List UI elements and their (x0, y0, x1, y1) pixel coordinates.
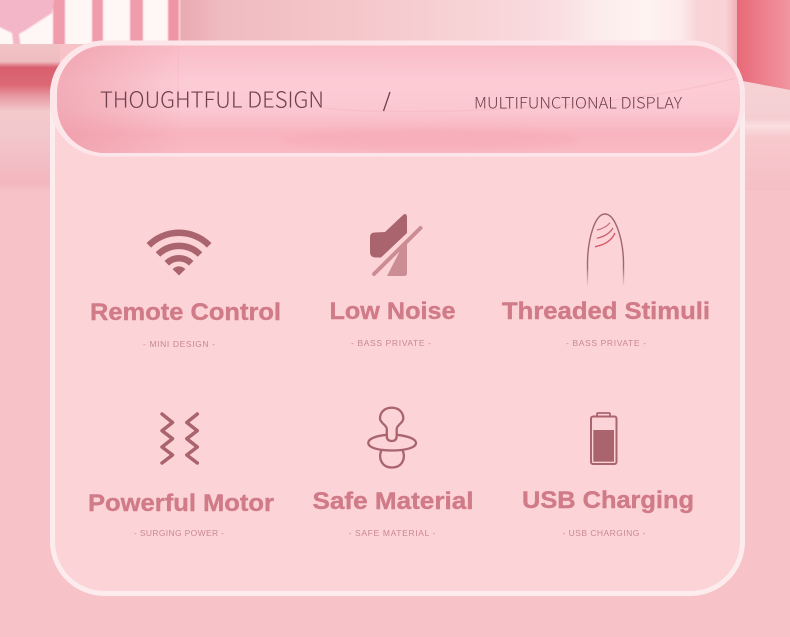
caption: safe material: - SAFE MATERIAL - (348, 528, 436, 538)
title: safe material: Safe Material (312, 488, 474, 515)
feature: low noise (330, 214, 456, 348)
feature: powerful motor (88, 414, 275, 538)
heading: thoughtful design: THOUGHTFUL DESIGN (100, 82, 324, 114)
icon: muted speaker (370, 214, 420, 276)
icon: battery (591, 413, 616, 464)
caption: surging power: - SURGING POWER - (134, 528, 224, 538)
title: remote control: Remote Control (90, 299, 281, 326)
icon: wifi (149, 233, 209, 276)
subheading: multifunctional display: MULTIFUNCTIONAL DISPLAY (474, 90, 682, 114)
caption: usb charging: - USB CHARGING - (562, 528, 646, 538)
separator slash (384, 92, 390, 111)
header pill (50, 40, 745, 156)
title: low noise: Low Noise (330, 298, 456, 325)
caption: bass private: - BASS PRIVATE - (351, 338, 431, 348)
icon: pacifier (368, 408, 416, 468)
feature: usb charging (522, 413, 694, 538)
main translucent panel (52, 43, 742, 594)
title: usb charging: USB Charging (522, 487, 694, 514)
feature: remote control (90, 233, 281, 349)
feature: threaded stimuli (502, 214, 710, 348)
icon: vibration zigzags (162, 414, 197, 463)
caption: mini design: - MINI DESIGN - (143, 339, 215, 349)
title: threaded stimuli: Threaded Stimuli (502, 298, 710, 325)
title: powerful motor: Powerful Motor (88, 490, 275, 517)
icon: finger (588, 214, 624, 287)
background photo scene (0, 0, 790, 186)
caption: bass private: - BASS PRIVATE - (566, 338, 646, 348)
feature: safe material (312, 408, 474, 538)
